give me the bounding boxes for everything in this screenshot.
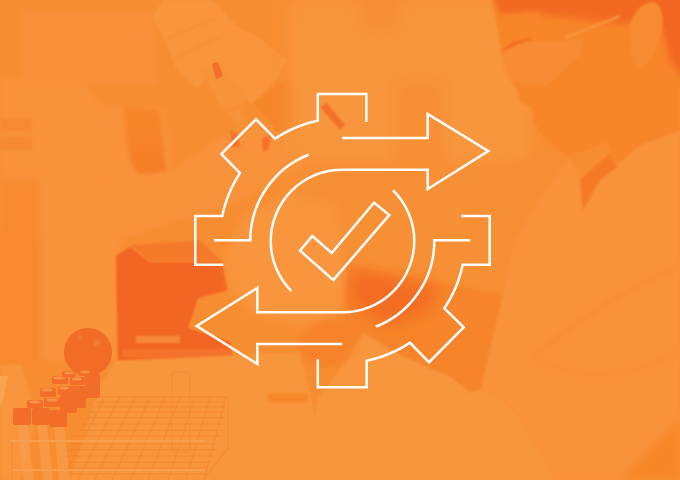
gloved hand with tube xyxy=(225,195,345,325)
inner gear arc, upper left xyxy=(214,155,309,240)
scientist face xyxy=(492,0,680,165)
pipette body xyxy=(200,63,268,193)
gear outline, lower right xyxy=(318,216,490,387)
coat folds and lower-right shade xyxy=(530,265,680,480)
left corner instrument xyxy=(0,365,36,480)
test tube rack xyxy=(10,372,228,480)
dark shadow under the sleeve xyxy=(345,265,503,393)
lab bench xyxy=(70,352,330,480)
dark glove round shadow xyxy=(298,318,368,368)
arrow pointing right xyxy=(271,114,488,291)
coat sleeve reaching across xyxy=(250,150,590,300)
ear xyxy=(630,2,663,70)
pipette window xyxy=(212,62,223,79)
hair xyxy=(490,0,680,85)
dark parts around the tip xyxy=(230,130,272,152)
wrist and cuff xyxy=(253,78,315,132)
inner gear arc, lower right xyxy=(376,240,470,327)
icon: gear with arrows and checkmark xyxy=(195,94,490,387)
blurred background, upper middle xyxy=(290,0,530,170)
eyebrow xyxy=(500,37,532,52)
safety goggles xyxy=(500,16,620,86)
gear outline, upper left xyxy=(195,94,366,265)
gloved hand holding pipette xyxy=(153,0,287,103)
icon: checkmark xyxy=(300,203,389,280)
arrow pointing left xyxy=(197,190,414,364)
microscope, dark silhouette xyxy=(116,240,232,361)
lower sleeve cuff xyxy=(300,333,555,480)
pipette marker behind the gear xyxy=(320,103,345,130)
test tubes with dark caps xyxy=(13,370,100,480)
label on the bench xyxy=(268,393,308,403)
lab coat body, right side xyxy=(470,130,680,480)
back wall and equipment, upper left xyxy=(0,10,300,370)
dark round flask xyxy=(64,328,112,376)
neck shadow and collar xyxy=(580,153,617,210)
